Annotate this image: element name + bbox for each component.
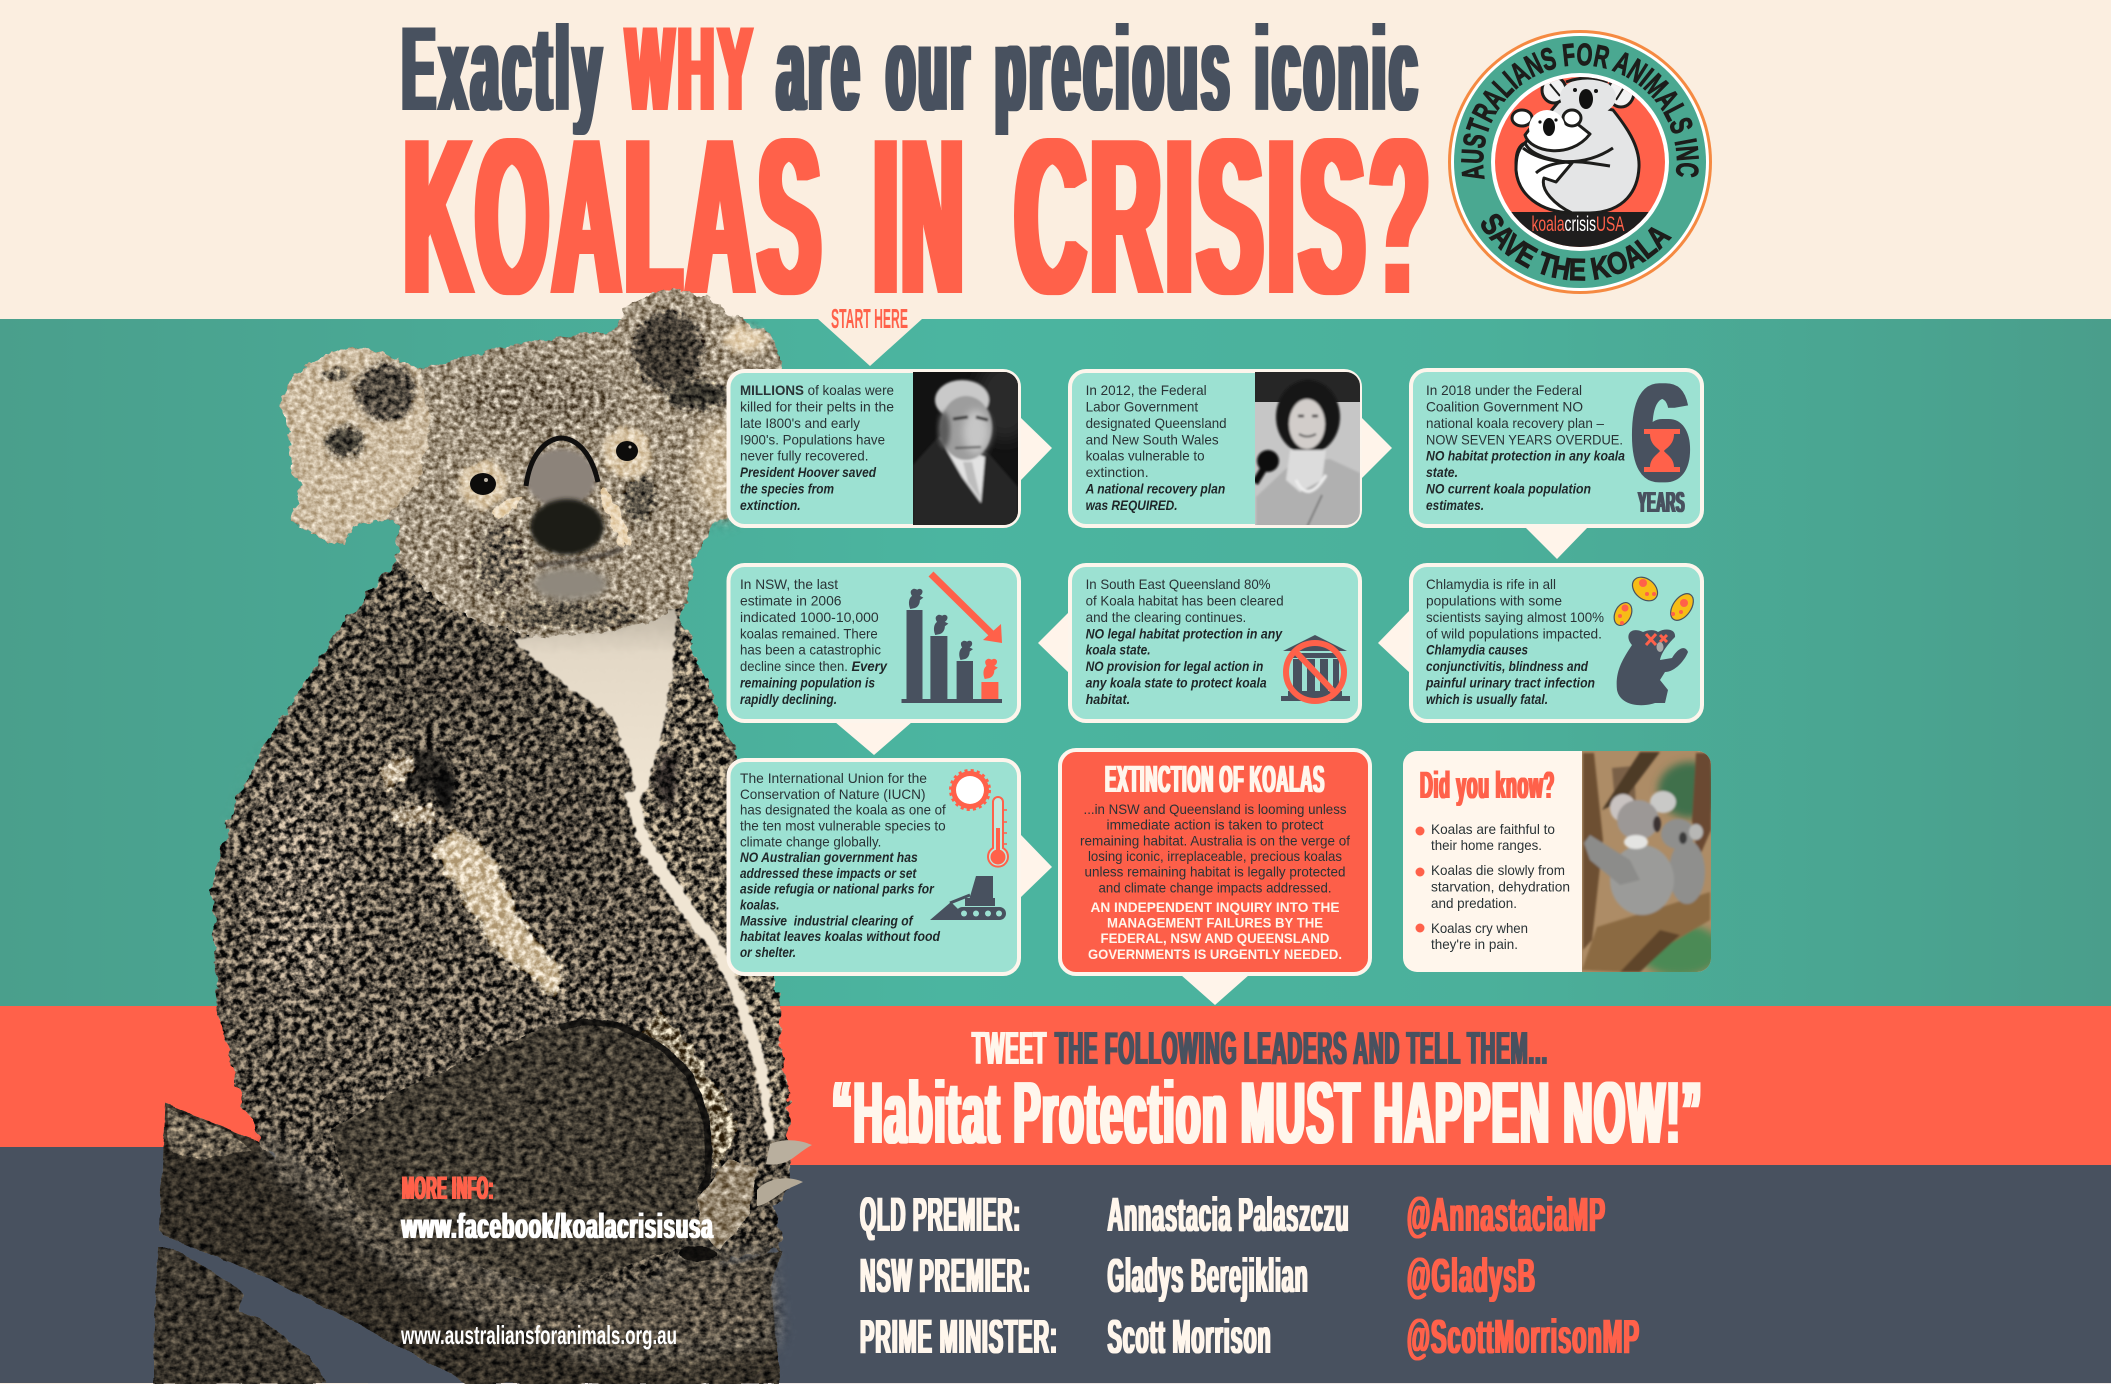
text block: 2012: [1085, 382, 1227, 513]
logo koala mother and baby: [1512, 77, 1639, 213]
text block: extinction warning: and climate change impacts addressed.: [1098, 879, 1332, 895]
photo: two koalas on a branch: [1582, 751, 1722, 976]
koala chest and stripe: [513, 606, 775, 1142]
panel: extinction of koalas: [1060, 750, 1370, 974]
koala photograph: [153, 288, 812, 1384]
koala claws: [757, 1140, 812, 1206]
logo badge: Australians for Animals: [1448, 30, 1712, 294]
leaders table: @AnnastaciaMP: [1407, 1189, 1606, 1242]
bullet list of facts: their home ranges.: [1431, 837, 1542, 853]
text block: IUCN: or shelter.: [740, 944, 796, 960]
logo ring text: organisation name: AUSTRALIANS FOR ANIMALS INC: [1461, 43, 1699, 180]
text block: IUCN: NO Australian government has: [740, 849, 918, 865]
text block: NSW: has been a catastrophic: [740, 642, 881, 658]
text block: chlamydia: scientists saying almost 100%: [1426, 609, 1604, 625]
text block: 2012: In 2012, the Federal: [1086, 382, 1207, 398]
text block: NSW: decline since then. Every: [740, 658, 888, 674]
arrows between panels: [835, 418, 1588, 1005]
text block: south east Queensland: NO provision for legal action in: [1086, 658, 1263, 674]
title line one: Exactly: [402, 2, 605, 136]
text block: 2018: state.: [1426, 464, 1458, 480]
panel: extinction of koalas: EXTINCTION OF KOALAS: [1105, 759, 1325, 801]
photo: prime minister Gillard: [1255, 372, 1360, 527]
text block: IUCN: addressed these impacts or set: [740, 865, 917, 881]
text block: south east Queensland: of Koala habitat has been cleared: [1086, 592, 1284, 608]
infographic canvas: iconic: [1255, 2, 1421, 136]
text block: millions: I900's. Populations have: [740, 431, 885, 447]
text block: IUCN: Massive industrial clearing of: [740, 912, 914, 928]
lower branch: [153, 1103, 782, 1384]
text block: NSW: [740, 576, 888, 707]
bullet list of facts: Koalas are faithful to: [1431, 821, 1555, 837]
text block: 2018: NOW SEVEN YEARS OVERDUE.: [1426, 431, 1623, 447]
text block: extinction warning: ...in NSW and Queensland is looming unless: [1084, 801, 1346, 817]
text block: 2018: national koala recovery plan –: [1426, 415, 1604, 431]
text block: NSW: In NSW, the last: [740, 576, 838, 592]
text block: chlamydia: populations with some: [1426, 592, 1562, 608]
text block: IUCN: aside refugia or national parks for: [740, 881, 935, 897]
text block: IUCN: The International Union for the: [740, 770, 927, 786]
icon: no legal protection: [1281, 635, 1350, 701]
text block: 2012: koalas vulnerable to: [1086, 448, 1205, 464]
text block: IUCN: koalas.: [740, 896, 780, 912]
row: NSW premier: [860, 1250, 1536, 1303]
text block: extinction warning: losing iconic, irreplaceable, precious koalas: [1088, 848, 1342, 864]
text block: 2018: estimates.: [1426, 497, 1484, 513]
text block: 2012: designated Queensland: [1086, 415, 1227, 431]
text block: chlamydia: [1425, 576, 1604, 707]
koala head and ears: [280, 288, 790, 637]
row: prime minister: [860, 1311, 1640, 1364]
text block: chlamydia: conjunctivitis, blindness and: [1426, 658, 1588, 674]
title line one: [402, 2, 1421, 136]
dark footer band: [0, 1147, 2111, 1383]
text block: extinction warning: remaining habitat. Australia is on the verge of: [1080, 832, 1350, 848]
title line one: our: [886, 2, 972, 136]
text block: 2018: [1426, 382, 1625, 513]
photo: president Hoover: [913, 372, 1018, 525]
title line one: precious: [995, 2, 1233, 136]
icon: bacteria and sick koala: [1611, 572, 1698, 705]
text block: chlamydia: which is usually fatal.: [1426, 691, 1548, 707]
text block: millions: the species from: [740, 481, 834, 497]
text block: NSW: rapidly declining.: [740, 691, 837, 707]
text block: 2012: was REQUIRED.: [1086, 497, 1178, 513]
text block: extinction warning: [1080, 801, 1350, 895]
bullet list of facts: they're in pain.: [1431, 936, 1518, 952]
logo ring text: save the koala: SAVE THE KOALA: [1481, 214, 1672, 281]
panel: NSW population: [728, 565, 1019, 721]
text block: independent inquiry: [1088, 899, 1342, 962]
text block: extinction warning: unless remaining habitat is legally protected: [1084, 864, 1346, 880]
text block: 2012: extinction.: [1086, 464, 1149, 480]
coral call to action band: [0, 1006, 2111, 1165]
start here arrow: [818, 303, 922, 366]
text block: chlamydia: painful urinary tract infection: [1425, 675, 1595, 691]
tweet instruction heading: TWEET: [972, 1022, 1047, 1074]
text block: south east Queensland: habitat.: [1086, 691, 1130, 707]
icon: six years hourglass: 6: [1631, 354, 1691, 511]
bullet list of facts: Koalas cry when: [1431, 920, 1528, 936]
text block: south east Queensland: any koala state to protect koala: [1086, 675, 1267, 691]
text block: 2012: A national recovery plan: [1085, 481, 1225, 497]
row: QLD premier: [860, 1189, 1606, 1242]
row: NSW premier: @GladysB: [1407, 1250, 1536, 1303]
text block: independent inquiry: GOVERNMENTS IS URGENTLY NEEDED.: [1088, 946, 1342, 962]
title line one: WHY: [626, 2, 756, 136]
panel: 2012 labor government: [1070, 371, 1360, 527]
start here arrow: START HERE: [831, 303, 908, 334]
panel: 2018 coalition government: [1411, 354, 1702, 526]
bullet list of facts: Koalas die slowly from: [1431, 862, 1565, 878]
text block: chlamydia: Chlamydia causes: [1426, 642, 1528, 658]
more info links: [400, 1170, 714, 1350]
text block: independent inquiry: FEDERAL, NSW AND QUEENSLAND: [1100, 930, 1330, 946]
text block: south east Queensland: NO legal habitat protection in any: [1086, 625, 1283, 641]
icon: sun: [951, 771, 989, 809]
text block: south east Queensland: In South East Queensland 80%: [1086, 576, 1271, 592]
text block: NSW: estimate in 2006: [740, 592, 842, 608]
row: NSW premier: NSW PREMIER:: [860, 1250, 1031, 1303]
text block: 2018: Coalition Government NO: [1426, 398, 1583, 414]
infographic canvas: CRISIS?: [1015, 93, 1434, 341]
bullet list of facts: starvation, dehydration: [1431, 878, 1570, 894]
text block: 2012: Labor Government: [1086, 398, 1198, 414]
text block: NSW: koalas remained. There: [740, 625, 878, 641]
icon: bulldozer: [930, 876, 1006, 920]
leaders table: [860, 1189, 1640, 1364]
facebook url: www.facebook/koalacrisisusa: [401, 1207, 714, 1246]
text block: millions: late I800's and early: [740, 415, 860, 431]
icon: thermometer: [988, 797, 1008, 867]
text block: millions: [740, 382, 894, 513]
row: NSW premier: Gladys Berejiklian: [1108, 1250, 1308, 1303]
text block: independent inquiry: MANAGEMENT FAILURES BY THE: [1107, 914, 1323, 930]
text block: NSW: indicated 1000-10,000: [740, 609, 879, 625]
bullet list of facts: [1416, 821, 1570, 952]
row: QLD premier: Annastacia Palaszczu: [1108, 1189, 1350, 1242]
text block: millions: MILLIONS of koalas were: [740, 382, 894, 398]
text block: independent inquiry: AN INDEPENDENT INQUIRY INTO THE: [1090, 899, 1340, 915]
text block: south east Queensland: [1086, 576, 1284, 707]
row: QLD premier: QLD PREMIER:: [860, 1189, 1021, 1242]
text block: NSW: remaining population is: [740, 675, 875, 691]
koala thigh and foot: [262, 1023, 776, 1360]
infographic canvas: @ScottMorrisonMP: [1407, 1311, 1640, 1364]
text block: 2018: In 2018 under the Federal: [1426, 382, 1582, 398]
cream header band: [0, 0, 2111, 319]
title line two: koalas in crisis: KOALAS: [404, 93, 825, 341]
text block: south east Queensland: koala state.: [1086, 642, 1151, 658]
icon: six years hourglass: YEARS: [1638, 487, 1685, 519]
title line two: koalas in crisis: IN: [874, 93, 967, 341]
text block: IUCN: [740, 770, 946, 960]
title line one: are: [777, 2, 863, 136]
text block: IUCN: the ten most vulnerable species to: [740, 818, 946, 834]
website url: www.australiansforanimals.org.au: [400, 1320, 677, 1350]
text block: IUCN: habitat leaves koalas without food: [740, 928, 940, 944]
text block: millions: extinction.: [740, 497, 801, 513]
text block: millions: President Hoover saved: [740, 464, 876, 480]
panel: millions killed: [728, 360, 1035, 527]
bullet list of facts: and predation.: [1431, 895, 1517, 911]
tweet instruction heading: [972, 1022, 1548, 1074]
text block: IUCN: Conservation of Nature (IUCN): [740, 786, 926, 802]
panel: IUCN climate change: [728, 760, 1019, 974]
koala body fur: [212, 560, 792, 1320]
row: prime minister: Scott Morrison: [1108, 1311, 1272, 1364]
text block: millions: killed for their pelts in the: [740, 398, 894, 414]
panel: did you know: [1403, 751, 1722, 976]
text block: millions: never fully recovered.: [740, 448, 868, 464]
panel: did you know: Did you know?: [1420, 765, 1555, 807]
more info links: MORE INFO:: [402, 1170, 494, 1206]
text block: extinction warning: immediate action is taken to protect: [1106, 817, 1324, 833]
text block: south east Queensland: and the clearing continues.: [1086, 609, 1246, 625]
text block: IUCN: has designated the koala as one of: [740, 802, 946, 818]
panel: south east Queensland: [1070, 565, 1360, 721]
logo small text: koalacrisisUSA: [1532, 213, 1624, 236]
chart: declining koala bars: [902, 574, 1002, 703]
text block: 2018: NO current koala population: [1426, 481, 1591, 497]
koala nose, eyes and mouth: [470, 438, 638, 601]
panel: chlamydia: [1411, 565, 1702, 721]
text block: IUCN: climate change globally.: [740, 833, 881, 849]
teal main band: [0, 319, 2111, 1006]
text block: 2012: and New South Wales: [1086, 431, 1219, 447]
text block: chlamydia: Chlamydia is rife in all: [1426, 576, 1556, 592]
text block: 2018: NO habitat protection in any koala: [1426, 448, 1625, 464]
row: prime minister: PRIME MINISTER:: [860, 1311, 1058, 1364]
text block: chlamydia: of wild populations impacted.: [1426, 625, 1602, 641]
